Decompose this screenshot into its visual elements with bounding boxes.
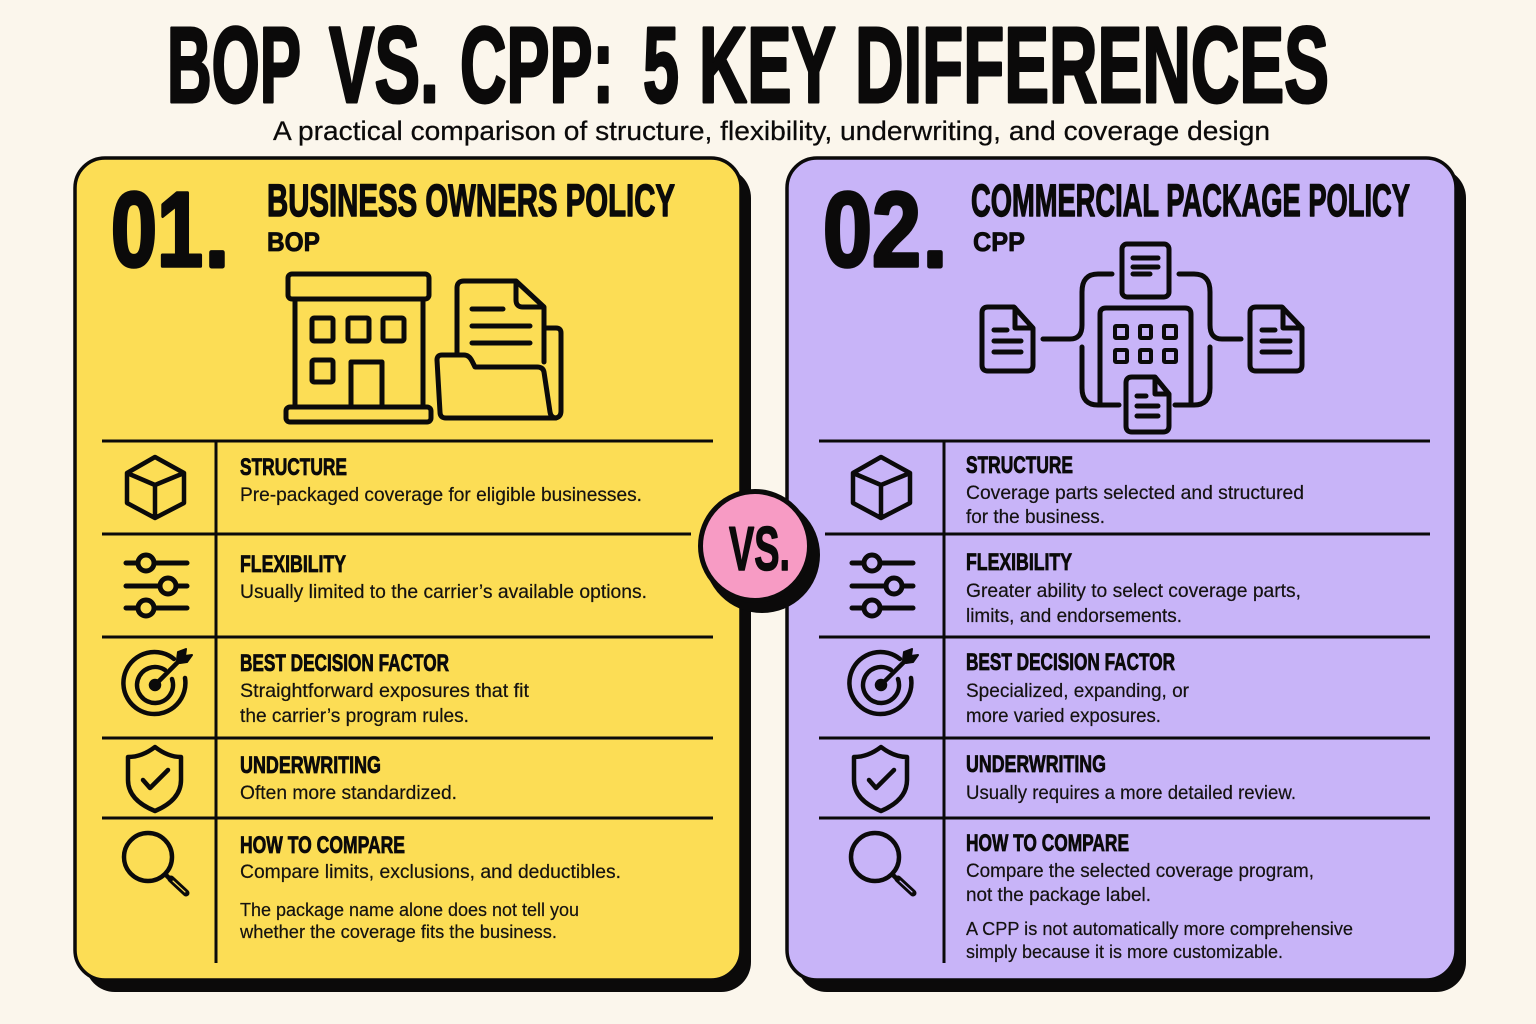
row: flexibility xyxy=(126,551,647,616)
row: best decision factor xyxy=(123,649,530,727)
icon: shield xyxy=(128,747,181,811)
title xyxy=(167,4,1329,125)
row: best decision factor: more varied exposures. xyxy=(966,705,1161,727)
icon: target xyxy=(849,649,918,714)
panel abbreviation: CPP xyxy=(973,227,1025,257)
row: structure: Coverage parts selected and structured xyxy=(966,482,1304,504)
row: how to compare: HOW TO COMPARE xyxy=(240,832,405,859)
row: structure xyxy=(127,454,642,518)
icon: target xyxy=(123,649,192,714)
title: CPP: xyxy=(460,4,614,125)
row: structure: STRUCTURE xyxy=(966,452,1073,479)
row: structure: Pre-packaged coverage for eligible businesses. xyxy=(240,484,642,506)
panel: commercial package policy xyxy=(787,158,1466,992)
panel number 02: 02 xyxy=(823,171,921,289)
row: how to compare: simply because it is more customizable. xyxy=(966,941,1283,962)
row: underwriting xyxy=(128,747,457,811)
row: underwriting xyxy=(854,747,1296,811)
row: how to compare: Compare the selected coverage program, xyxy=(966,860,1314,882)
panel heading: BUSINESS OWNERS POLICY xyxy=(267,175,675,226)
icon: sliders xyxy=(126,555,187,616)
icon: building with connected documents xyxy=(982,244,1302,432)
row: best decision factor: BEST DECISION FACTOR xyxy=(966,649,1175,676)
panel number 01: 01 xyxy=(111,171,203,289)
row: structure: for the business. xyxy=(966,506,1105,528)
row: flexibility: Usually limited to the carrier’s available options. xyxy=(240,581,647,603)
title: 5 xyxy=(643,4,679,125)
row: best decision factor: the carrier’s program rules. xyxy=(240,705,469,727)
row: flexibility: FLEXIBILITY xyxy=(966,549,1072,576)
divider lines and rows xyxy=(819,441,1430,963)
vs badge: VS. xyxy=(729,515,790,584)
row: flexibility: FLEXIBILITY xyxy=(240,551,346,578)
row: underwriting: Often more standardized. xyxy=(240,782,457,804)
row: how to compare xyxy=(124,832,621,942)
title: VS. xyxy=(329,4,439,125)
panel number 02: . xyxy=(924,186,946,286)
row: how to compare: A CPP is not automatically more comprehensive xyxy=(966,918,1353,939)
icon: shield xyxy=(854,747,907,811)
row: how to compare: The package name alone does not tell you xyxy=(240,899,579,920)
icon: magnifier xyxy=(124,833,186,893)
row: best decision factor xyxy=(849,649,1189,727)
row: best decision factor: Specialized, expanding, or xyxy=(966,680,1189,702)
row: how to compare xyxy=(851,830,1353,962)
icon: magnifier xyxy=(851,833,913,893)
icon: cube xyxy=(853,457,910,518)
row: flexibility: Greater ability to select coverage parts, xyxy=(966,580,1301,602)
row: underwriting: UNDERWRITING xyxy=(966,751,1106,778)
row: flexibility: limits, and endorsements. xyxy=(966,605,1182,627)
row: structure: STRUCTURE xyxy=(240,454,347,481)
panel number 01: . xyxy=(206,186,228,286)
subtitle: A practical comparison of structure, flexibility, underwriting, and coverage design xyxy=(273,116,1270,146)
row: best decision factor: Straightforward exposures that fit xyxy=(240,680,530,702)
row: best decision factor: BEST DECISION FACTOR xyxy=(240,650,449,677)
row: how to compare: whether the coverage fits the business. xyxy=(239,921,557,942)
row: how to compare: Compare limits, exclusions, and deductibles. xyxy=(240,861,621,883)
panel: business owners policy xyxy=(75,158,751,992)
panel abbreviation: BOP xyxy=(267,227,320,257)
row: how to compare: HOW TO COMPARE xyxy=(966,830,1129,857)
icon: sliders xyxy=(852,555,913,616)
title: BOP xyxy=(167,4,301,125)
row: structure xyxy=(853,452,1304,528)
vs badge xyxy=(700,492,820,613)
icon: cube xyxy=(127,457,184,518)
row: underwriting: Usually requires a more detailed review. xyxy=(966,782,1296,804)
icon: building with folder xyxy=(286,274,561,422)
row: how to compare: not the package label. xyxy=(966,884,1151,906)
title: KEY xyxy=(699,4,836,125)
row: flexibility xyxy=(852,549,1301,627)
row: underwriting: UNDERWRITING xyxy=(240,752,381,779)
divider lines and rows xyxy=(102,441,713,963)
